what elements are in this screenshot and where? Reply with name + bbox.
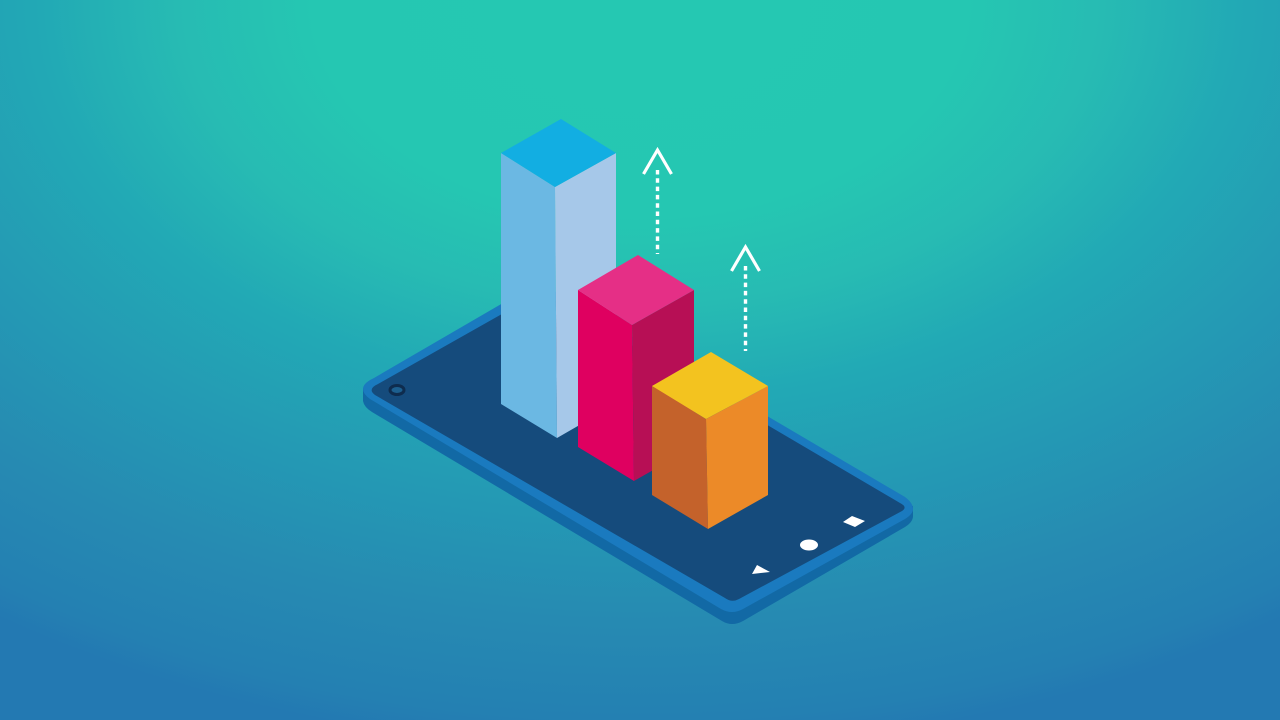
tall blue bar — [501, 119, 616, 438]
icon: home circle button — [800, 540, 818, 550]
icon: back triangle button — [752, 565, 770, 574]
short orange bar — [652, 352, 768, 529]
icon: menu diamond button — [843, 516, 865, 527]
arrow: growth over orange bar — [732, 247, 760, 351]
phone — [363, 282, 913, 624]
phone screen — [372, 292, 905, 601]
arrow: growth over pink bar — [644, 150, 672, 254]
phone side edge — [363, 388, 913, 624]
phone frame — [363, 282, 913, 612]
icon: camera — [390, 386, 404, 394]
medium pink bar — [578, 255, 694, 481]
